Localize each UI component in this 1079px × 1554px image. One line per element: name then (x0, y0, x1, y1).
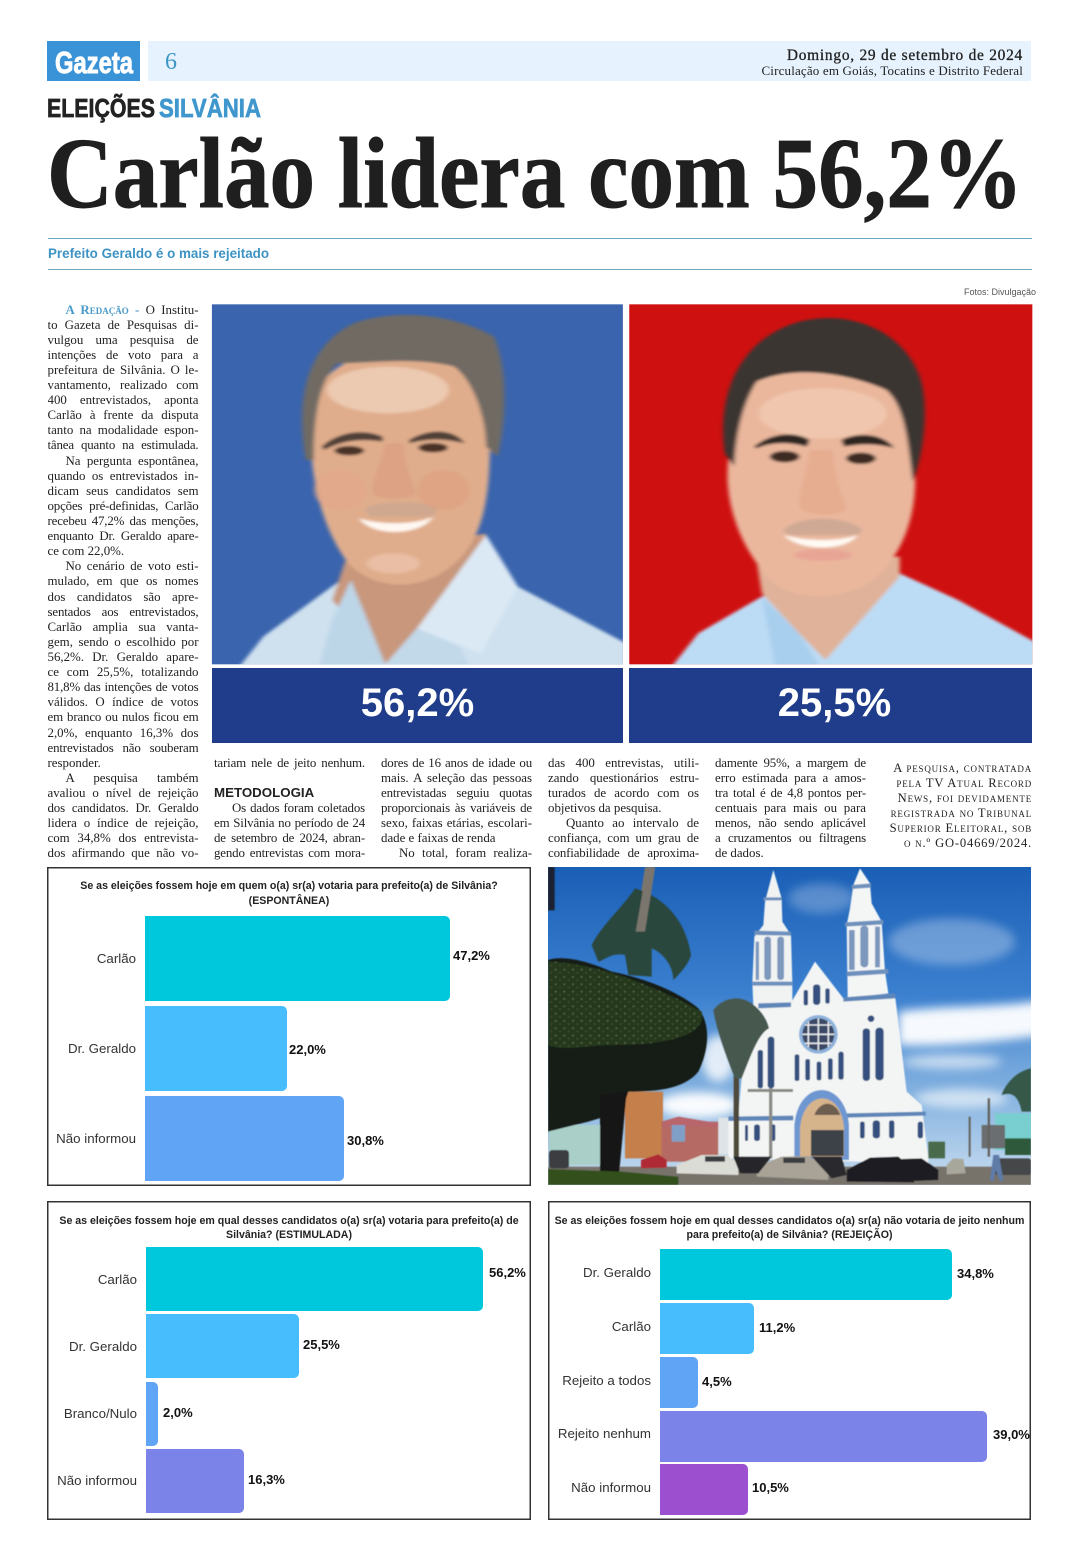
result box: Carlão 56,2% (212, 668, 623, 743)
street trees and pole (1002, 1068, 1031, 1112)
text column 4: confiabilidade de aproxima- (548, 846, 699, 860)
chart: rejeição: 11,2% (759, 1320, 795, 1335)
chart title: Se as eleições fossem hoje em quem o(a) sr(a) votaria para prefeito(a) de Silvânia? (80, 880, 498, 892)
bar: Rejeito nenhum (660, 1411, 987, 1462)
text column 1: ce com 22,0%. (48, 544, 124, 558)
chart: rejeição: 39,0% (993, 1427, 1030, 1442)
text column 1: Carlão à frente da disputa (48, 408, 198, 422)
text column 6: registration note: registrada no Tribunal (891, 806, 1032, 820)
chart title: Se as eleições fossem hoje em qual desses candidatos o(a) sr(a) não votaria de jeito nenhum (555, 1215, 1024, 1227)
text column 1: válidos. O índice de votos (48, 695, 198, 709)
bar: Não informou (660, 1464, 748, 1515)
text column 1: No cenário de voto esti- (66, 559, 198, 573)
text column 1: tânea quanto na estimulada. (48, 438, 198, 452)
text column 2: de setembro de 2024, abran- (214, 831, 365, 845)
text column 3: entrevistadas seguiu quotas (381, 786, 532, 800)
text column 5: de dados. (715, 846, 764, 860)
text column 1: 81,8% das intenções de votos (48, 680, 198, 694)
chart: espontânea (47, 867, 531, 1186)
section label: Eleições Silvânia: ELEIÇÕES (47, 93, 155, 123)
result box: Geraldo 25,5%: 25,5% (778, 681, 891, 725)
church body (728, 962, 928, 1163)
text column 5: menos, não sendo aplicável (715, 816, 866, 830)
text column 3: mais. A seleção das pessoas (381, 771, 532, 785)
text column 1: 56,2%. Dr. Geraldo apare- (48, 650, 198, 664)
text column 1: intenções de voto para a (48, 348, 198, 362)
chart: espontânea: 47,2% (453, 948, 490, 963)
chart: espontânea: 30,8% (347, 1133, 384, 1148)
text column 1: recebeu 47,2% das menções, (48, 514, 198, 528)
chart: rejeição: 4,5% (702, 1374, 732, 1389)
bar: Não informou (145, 1096, 344, 1181)
chart: rejeição: Carlão (612, 1319, 651, 1334)
text column 6: registration note: o n.º GO-04669/2024. (904, 836, 1032, 850)
chart: rejeição: 34,8% (957, 1266, 994, 1281)
facade bands (728, 993, 926, 1121)
chart: estimulada: Não informou (57, 1473, 137, 1488)
right tower (847, 868, 888, 998)
text column 1: prefeitura de Silvânia. O le- (48, 363, 198, 377)
chart: espontânea: Carlão (97, 951, 136, 966)
text column 1: vantamento, realizado com (48, 378, 198, 392)
header bar: page number and date (148, 41, 1031, 81)
bar: Branco/Nulo (146, 1382, 158, 1446)
text column 1: gem, sendo o escolhido por (48, 635, 198, 649)
chart: estimulada: Carlão (98, 1272, 137, 1287)
bar: Dr. Geraldo (146, 1314, 299, 1378)
text column 1: A Redação - O Institu- (66, 302, 198, 316)
text column 5: erro estimada para a amos- (715, 771, 866, 785)
text column 4: Quanto ao intervalo de (566, 816, 699, 830)
chart: estimulada: Branco/Nulo (64, 1406, 137, 1421)
text column 4: das 400 entrevistas, utili- (548, 756, 699, 770)
text column 1: opções pré-definidas, Carlão (48, 499, 198, 513)
street buildings (625, 1092, 663, 1158)
subheadline: Prefeito Geraldo é o mais rejeitado (48, 246, 269, 261)
text column 1: 2,0%, enquanto 16,3% dos (48, 726, 198, 740)
chart: estimulada: 16,3% (248, 1472, 285, 1487)
text column 4 (548, 756, 699, 860)
cross and palm (769, 1088, 772, 1158)
text column 5: damente 95%, a margem de (715, 756, 866, 770)
text column 5: tra total é de 4,8 pontos per- (715, 786, 866, 800)
chart title: para prefeito(a) de Silvânia? (REJEIÇÃO) (686, 1229, 893, 1241)
text column 1: A pesquisa também (66, 771, 198, 785)
bar: Carlão (145, 916, 450, 1001)
result box: Carlão 56,2%: 56,2% (361, 681, 474, 725)
chart: rejeição: Dr. Geraldo (583, 1265, 651, 1280)
text column 1: lidera o índice de rejeição, (48, 816, 198, 830)
text column 1: tanto na modalidade espon- (48, 423, 198, 437)
text column 1: com 34,8% dos entrevista- (48, 831, 198, 845)
chart title (555, 1215, 1024, 1241)
left tower (752, 870, 792, 1005)
text column 1: Na pergunta espontânea, (66, 454, 198, 468)
chart: estimulada: 25,5% (303, 1337, 340, 1352)
chart: rejeição: Não informou (571, 1480, 651, 1495)
text column 6: registration note: Superior Eleitoral, sob (890, 821, 1032, 835)
rose window (799, 1015, 838, 1054)
chart: estimulada: 56,2% (489, 1265, 526, 1280)
large dark tree (548, 958, 707, 1132)
bar: Rejeito a todos (660, 1357, 698, 1408)
bar: Dr. Geraldo (660, 1249, 952, 1300)
chart title: (ESPONTÂNEA) (249, 895, 329, 907)
bar: Dr. Geraldo (145, 1006, 287, 1091)
date and circulation (761, 47, 1023, 78)
chart: estimulada: 2,0% (163, 1405, 193, 1420)
chart: espontânea: Não informou (56, 1131, 136, 1146)
chart: espontânea: 22,0% (289, 1042, 326, 1057)
bar: Carlão (146, 1247, 483, 1311)
text column 2: tariam nele de jeito nenhum. (214, 756, 365, 770)
section label: Eleições Silvânia (47, 93, 261, 123)
photo credit: Fotos: Divulgação (964, 287, 1036, 297)
portrait: Carlão (212, 304, 623, 664)
text column 1: mulado, em que os nomes (48, 574, 198, 588)
text column 1 (48, 302, 198, 860)
date and circulation: Domingo, 29 de setembro de 2024 (787, 47, 1023, 64)
text column 1: Carlão amplia sua vanta- (48, 620, 198, 634)
text column 5 (715, 756, 866, 860)
pedestrian (990, 1155, 1003, 1182)
text column 2 (214, 756, 365, 860)
text column 1: dos candidatos são apre- (48, 590, 198, 604)
text column 1: dos candidatos. Dr. Geraldo (48, 801, 198, 815)
text column 6: registration note: pela TV Atual Record (896, 776, 1032, 790)
result box: Geraldo 25,5% (629, 668, 1032, 743)
bar: Não informou (146, 1449, 244, 1513)
text column 3: proporcionais às variáveis de (381, 801, 532, 815)
text column 1: dos afirmando que não vo- (48, 846, 198, 860)
text column 3: No total, foram realiza- (399, 846, 532, 860)
text column 3: dores de 16 anos de idade ou (381, 756, 532, 770)
chart title: Silvânia? (ESTIMULADA) (226, 1229, 352, 1241)
text column 1: avaliou o nível de rejeição (48, 786, 198, 800)
text column 3 (381, 756, 532, 860)
text column 1: sentados aos entrevistados, (48, 605, 198, 619)
text column 2: em Silvânia no período de 24 (214, 816, 365, 830)
text column 6: registration note: A pesquisa, contratada (893, 761, 1032, 775)
text column 5: a cruzamentos ou filtragens (715, 831, 866, 845)
text column 1: enquanto Dr. Geraldo apare- (48, 529, 198, 543)
text column 4: objetivos da pesquisa. (548, 801, 662, 815)
page number: 6 (165, 49, 177, 75)
door arch (794, 1090, 849, 1160)
text column 3: sexo, faixas etárias, escolari- (381, 816, 532, 830)
chart: rejeição: Rejeito a todos (562, 1373, 651, 1388)
text column 5: centuais para mais ou para (715, 801, 866, 815)
chart title: Se as eleições fossem hoje em qual desses candidatos o(a) sr(a) votaria para prefeito(a) de (59, 1215, 519, 1227)
text column 1: to Gazeta de Pesquisas di- (48, 318, 198, 332)
text column 1: dicam seus candidatos sem (48, 484, 198, 498)
chart: estimulada: Dr. Geraldo (69, 1339, 137, 1354)
text column 2: Os dados foram coletados (232, 801, 365, 815)
chart: espontânea: Dr. Geraldo (68, 1041, 136, 1056)
chart: rejeição: Rejeito nenhum (558, 1426, 651, 1441)
bar: Carlão (660, 1303, 754, 1354)
windows (745, 984, 923, 1141)
cars (677, 1155, 738, 1175)
text column 4: turados de acordo com os (548, 786, 699, 800)
text column 6: registration note: News, foi devidamente (898, 791, 1032, 805)
chart: rejeição: 10,5% (752, 1480, 789, 1495)
chart title (59, 1215, 519, 1241)
photo: church of Silvânia (548, 867, 1031, 1185)
text column 1: responder. (48, 756, 101, 770)
chart: estimulada (47, 1201, 531, 1520)
clouds (658, 883, 1045, 1118)
text column 1: em branco ou nulos ficou em (48, 710, 198, 724)
text column 1: ce com 25,5%, totalizando (48, 665, 198, 679)
text column 3: dade e faixas de renda (381, 831, 496, 845)
text column 6: registration note (890, 761, 1032, 850)
text column 1: 400 entrevistados, aponta (48, 393, 198, 407)
text column 4: confiança, com um grau de (548, 831, 699, 845)
tall palm (628, 867, 655, 975)
text column 1: vulgou uma pesquisa de (48, 333, 198, 347)
portrait: Dr. Geraldo (629, 304, 1032, 664)
chart: rejeição (548, 1201, 1031, 1520)
chart title (80, 880, 498, 907)
text column 1: quando os entrevistados in- (48, 469, 198, 483)
ground (548, 1167, 1031, 1185)
text column 4: zando questionários estru- (548, 771, 699, 785)
date and circulation: Circulação em Goiás, Tocatins e Distrito Federal (761, 63, 1023, 78)
text column 1: entrevistados não souberam (48, 741, 198, 755)
text column 2: gendo entrevistas com mora- (214, 846, 365, 860)
lawn (548, 1169, 678, 1185)
